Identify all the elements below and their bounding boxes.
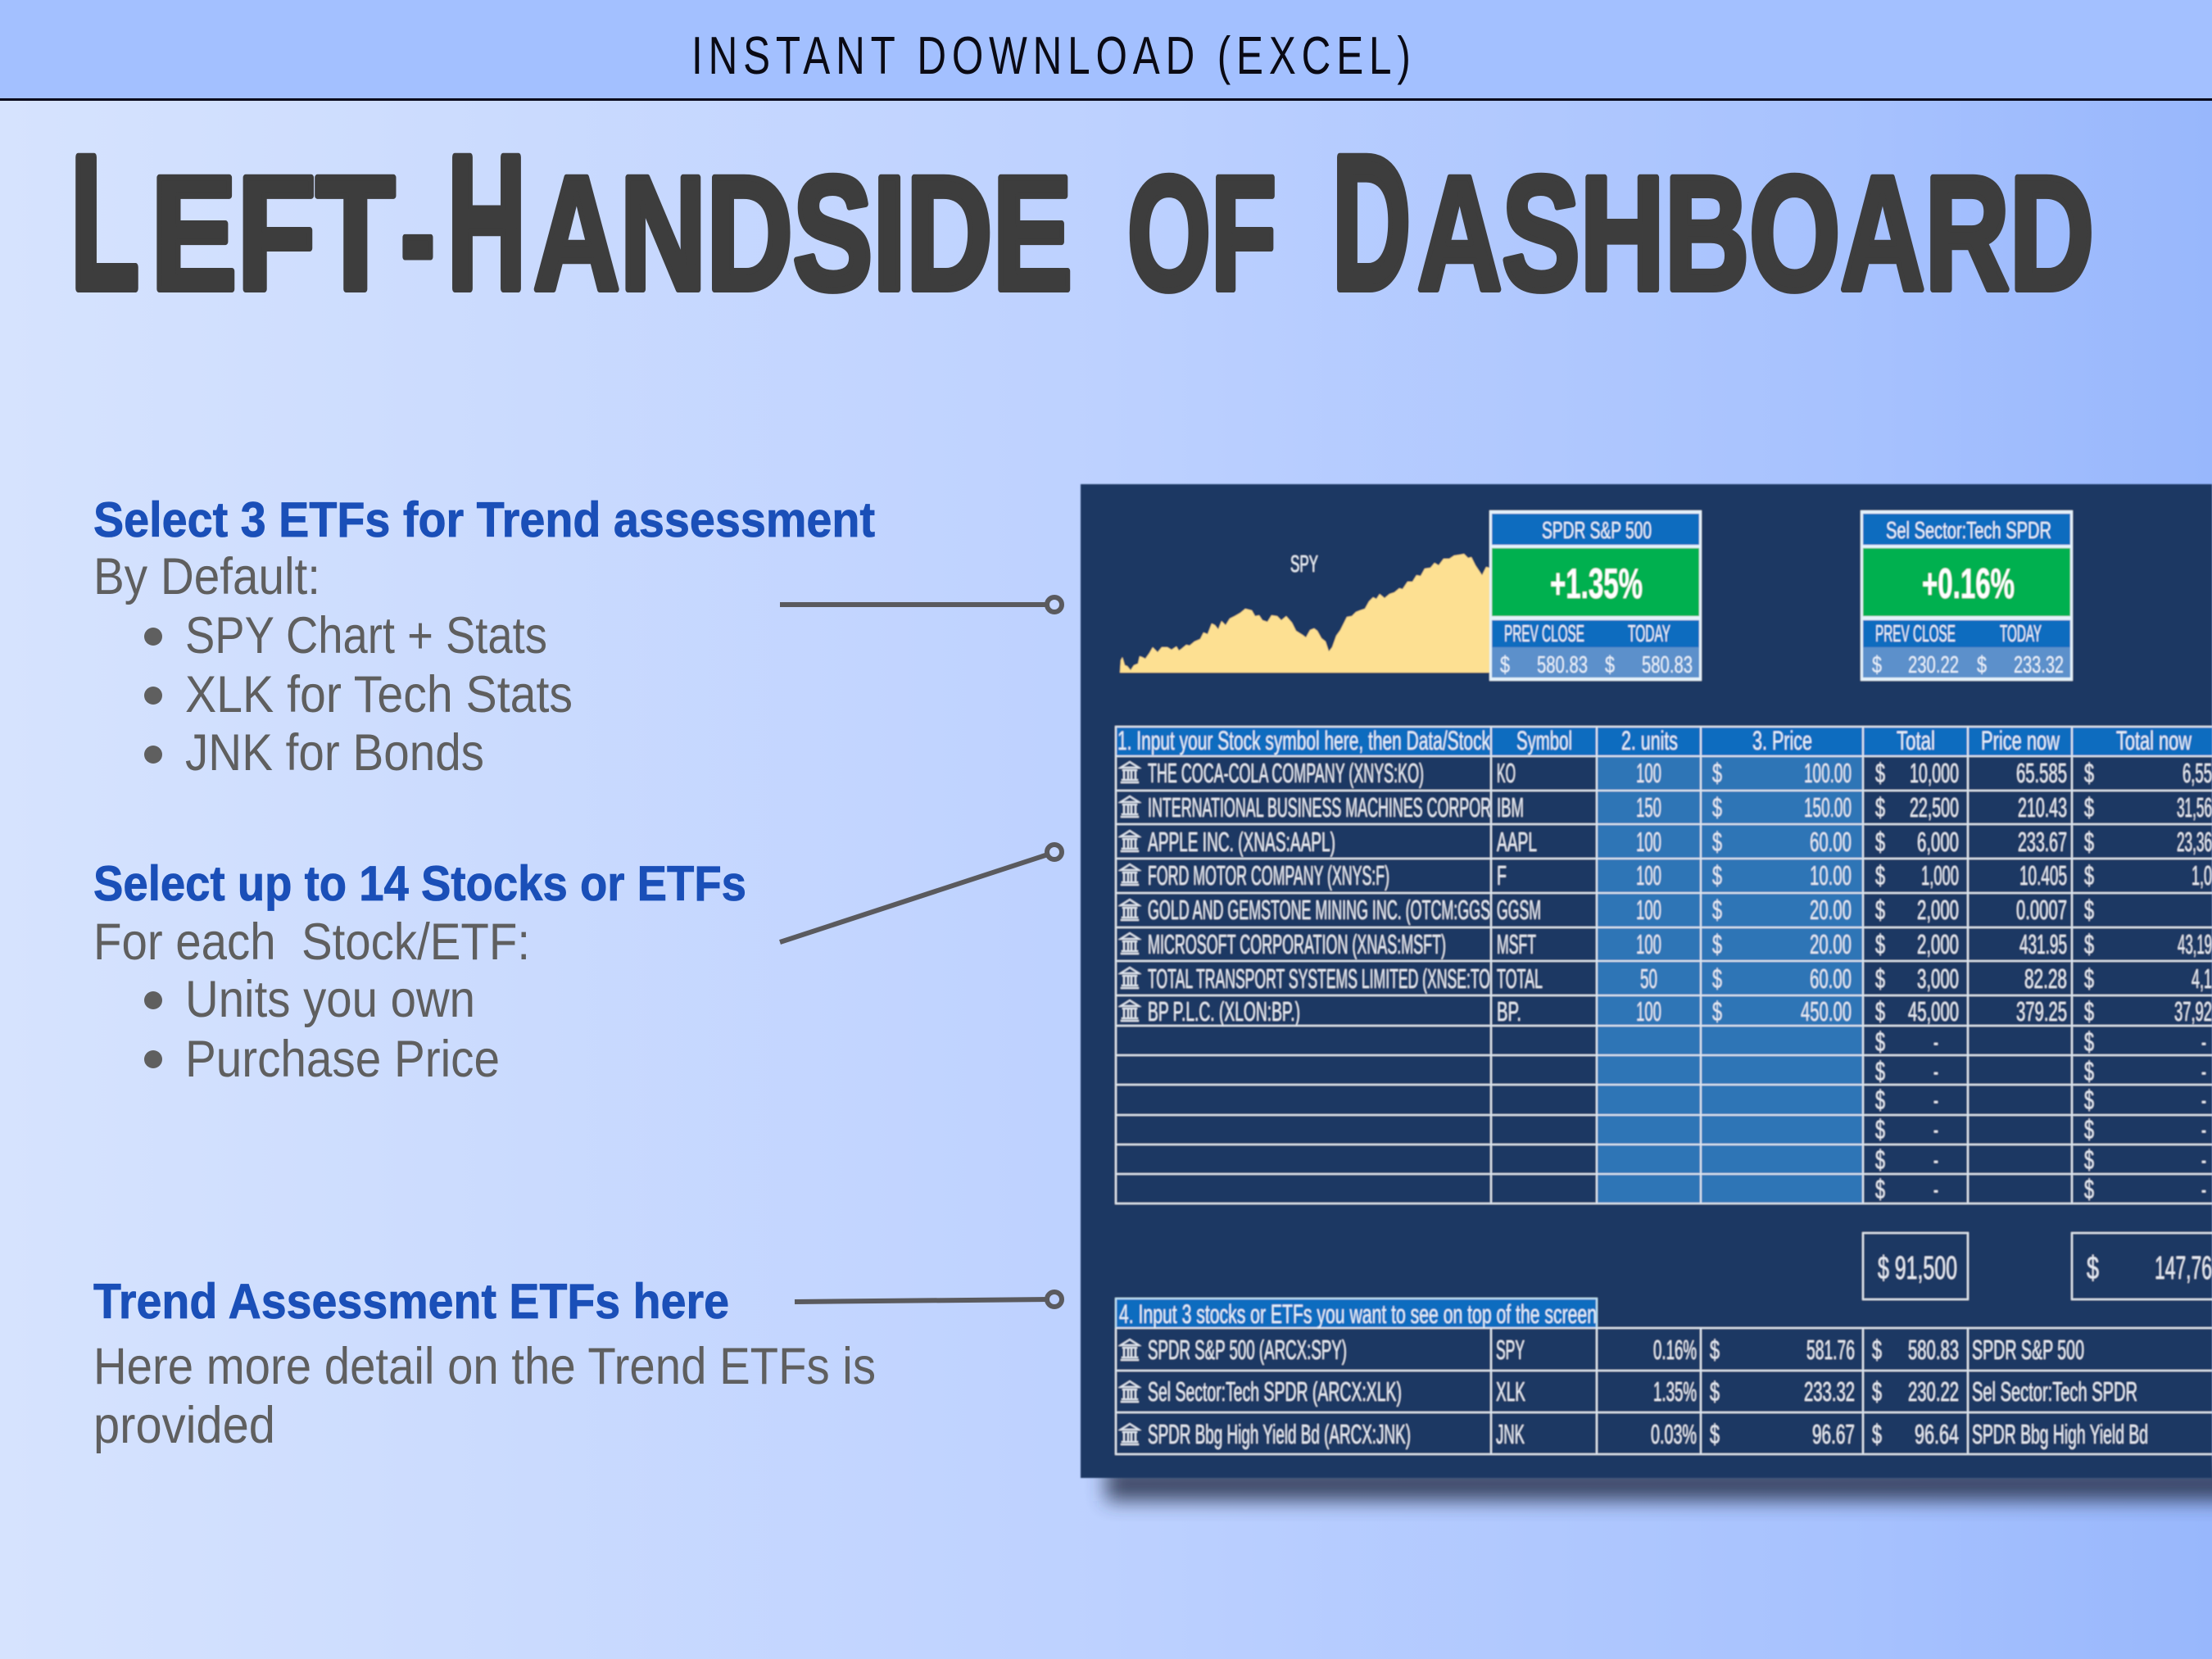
title: ANDSIDE [533, 143, 1072, 324]
empty rows: - [2201, 1114, 2206, 1145]
row: BP [1121, 996, 2212, 1027]
row: XLK: 233.32 [1804, 1376, 1855, 1407]
empty rows: $ [2084, 1174, 2094, 1204]
title: D [1332, 116, 1411, 329]
row: BP: BP. [1497, 996, 1521, 1027]
empty rows: $ [2084, 1145, 2094, 1175]
row: BP: $ [1712, 996, 1722, 1027]
row: XLK: $ [1872, 1376, 1882, 1407]
row: Gold and Gemstone [1121, 895, 2094, 925]
row: Microsoft: 20.00 [1810, 929, 1852, 959]
row: Gold and Gemstone: 0.0007 [2016, 895, 2067, 925]
card: SPDR S&P 500: 580.83 [1642, 652, 1693, 678]
title: EFT [151, 143, 395, 324]
title [70, 116, 2094, 329]
card: SPDR S&P 500 [1489, 510, 1702, 681]
row: Total Transport [1121, 963, 2212, 994]
row: Coca-Cola: $ [1875, 758, 1885, 788]
text block: trend ETFs: By Default: [93, 548, 320, 605]
row: XLK: $ [1710, 1376, 1720, 1407]
row: Apple: APPLE INC. (XNAS:AAPL) [1148, 827, 1335, 857]
total box: cost: $ 91,500 [1878, 1250, 1957, 1286]
row: IBM: INTERNATIONAL BUSINESS MACHINES CORPOR [1148, 792, 1491, 823]
row: Total Transport: TOTAL [1497, 963, 1543, 994]
row: SPY [1121, 1335, 2084, 1365]
empty rows: - [1933, 1145, 1938, 1175]
card: Sel Sector Tech SPDR: 230.22 [1908, 652, 1959, 678]
row: BP: 45,000 [1908, 996, 1959, 1027]
row: Coca-Cola: $ [2084, 758, 2094, 788]
text block: trend assessment [93, 1274, 876, 1454]
row: Coca-Cola: THE COCA-COLA COMPANY (XNYS:KO) [1148, 758, 1424, 788]
text block: stocks: For each Stock/ETF: [93, 913, 530, 971]
table header row: 3. Price [1752, 726, 1812, 755]
card: Sel Sector Tech SPDR: Sel Sector:Tech SPDR [1886, 518, 2051, 544]
row: BP: $ [2084, 996, 2094, 1027]
row: Microsoft [1121, 929, 2212, 959]
card: SPDR S&P 500: 580.83 [1537, 652, 1588, 678]
row: Microsoft: $ [1875, 929, 1885, 959]
table header row [1117, 726, 2192, 755]
row: Gold and Gemstone: $ [2084, 895, 2094, 925]
row: Total Transport: 50 [1640, 963, 1657, 994]
text block: trend assessment: Here more detail on the Trend ETFs is [93, 1338, 876, 1395]
row: SPY: 581.76 [1806, 1335, 1855, 1365]
row: Total Transport: $ [1712, 963, 1722, 994]
card: Sel Sector Tech SPDR [1861, 510, 2073, 681]
row: JNK: $ [1710, 1419, 1720, 1449]
row: JNK: 96.67 [1812, 1419, 1855, 1449]
text block: trend assessment: provided [93, 1397, 275, 1454]
row: Gold and Gemstone: $ [1875, 895, 1885, 925]
row: SPY: SPY [1496, 1335, 1525, 1365]
header band [0, 0, 2212, 101]
row: Coca-Cola: 100 [1636, 758, 1661, 788]
row: Total Transport: $ [2084, 963, 2094, 994]
empty rows: $ [1875, 1114, 1885, 1145]
row: Total Transport: 60.00 [1810, 963, 1852, 994]
row: XLK [1121, 1376, 2137, 1407]
panel shadow [1106, 1466, 2212, 1501]
row: SPY: $ [1872, 1335, 1882, 1365]
row: Ford: 10.405 [2019, 860, 2067, 891]
row: Ford: 10.00 [1810, 860, 1852, 891]
row: Total Transport: 3,000 [1917, 963, 1959, 994]
table: portfolio holdings [1116, 726, 2212, 1204]
row: Apple [1121, 827, 2212, 857]
row: Gold and Gemstone: GOLD AND GEMSTONE MINING INC. (OTCM:GGS [1148, 895, 1490, 925]
row: SPY: $ [1710, 1335, 1720, 1365]
title: OF [1127, 143, 1276, 324]
row: Gold and Gemstone: 20.00 [1810, 895, 1852, 925]
text block: stocks: Purchase Price [185, 1031, 500, 1088]
row: Apple: $ [2084, 827, 2094, 857]
row: XLK: Sel Sector:Tech SPDR (ARCX:XLK) [1148, 1376, 1402, 1407]
row: IBM: 22,500 [1910, 792, 1959, 823]
row: IBM: $ [1875, 792, 1885, 823]
arrow: trend connector [780, 597, 1062, 612]
row: Microsoft: 2,000 [1917, 929, 1959, 959]
text block: stocks: Select up to 14 Stocks or ETFs [93, 856, 746, 911]
row: SPY: SPDR S&P 500 (ARCX:SPY) [1148, 1335, 1347, 1365]
empty rows: - [2201, 1085, 2206, 1115]
row: JNK: 96.64 [1915, 1419, 1959, 1449]
row: Microsoft: $ [2084, 929, 2094, 959]
row: Coca-Cola: KO [1497, 758, 1516, 788]
table header row: Price now [1981, 726, 2060, 755]
row: BP: 100 [1636, 996, 1661, 1027]
table header row: Symbol [1516, 726, 1572, 755]
title: H [447, 116, 526, 329]
chart label: SPY [1290, 551, 1318, 578]
card: Sel Sector Tech SPDR: $ [1977, 652, 1987, 678]
empty rows: - [2201, 1174, 2206, 1204]
row: Gold and Gemstone: GGSM [1497, 895, 1541, 925]
arrow: trend ETF connector [795, 1292, 1062, 1307]
trend table header: 4. Input 3 stocks or ETFs you want to see on top of the screen [1119, 1299, 1597, 1329]
empty rows: - [1933, 1174, 1938, 1204]
text block: stocks [93, 856, 746, 1088]
row: Gold and Gemstone: $ [1712, 895, 1722, 925]
empty rows: $ [2084, 1085, 2094, 1115]
text block: trend ETFs: XLK for Tech Stats [185, 666, 573, 723]
row: Ford [1121, 860, 2212, 891]
empty rows: - [2201, 1027, 2206, 1057]
text block: trend ETFs [93, 492, 875, 782]
row: Apple: AAPL [1497, 827, 1537, 857]
card: Sel Sector Tech SPDR: 233.32 [2014, 652, 2064, 678]
row: Microsoft: MICROSOFT CORPORATION (XNAS:MSFT) [1148, 929, 1446, 959]
text block: trend ETFs: SPY Chart + Stats [185, 607, 547, 664]
row: Coca-Cola: 10,000 [1910, 758, 1959, 788]
empty rows: $ [1875, 1174, 1885, 1204]
text block: trend assessment: Trend Assessment ETFs here [93, 1274, 729, 1329]
empty rows: - [1933, 1027, 1938, 1057]
text block: stocks: Units you own [185, 971, 475, 1028]
table header row: 2. units [1621, 726, 1678, 755]
row: SPY: 0.16% [1653, 1335, 1697, 1365]
row: Apple: $ [1875, 827, 1885, 857]
card: SPDR S&P 500: $ [1500, 652, 1510, 678]
row: IBM: 150 [1636, 792, 1661, 823]
empty rows: $ [2084, 1027, 2094, 1057]
card: Sel Sector Tech SPDR: $ [1872, 652, 1882, 678]
title: - [401, 143, 435, 324]
row: IBM [1121, 792, 2212, 823]
title: L [70, 116, 139, 329]
empty rows: $ [1875, 1145, 1885, 1175]
panel: dashboard screenshot [1081, 484, 2212, 1478]
empty rows [1875, 1027, 2206, 1204]
card: SPDR S&P 500: SPDR S&P 500 [1542, 518, 1652, 544]
row: Apple: 60.00 [1810, 827, 1852, 857]
row: JNK [1121, 1419, 2148, 1449]
row: Ford: FORD MOTOR COMPANY (XNYS:F) [1148, 860, 1389, 891]
text block: trend ETFs: Select 3 ETFs for Trend assessment [93, 492, 875, 547]
empty rows: - [1933, 1056, 1938, 1086]
empty rows: $ [1875, 1027, 1885, 1057]
row: IBM: 150.00 [1804, 792, 1852, 823]
card: Sel Sector Tech SPDR: +0.16% [1922, 560, 2015, 608]
row: Apple: 100 [1636, 827, 1661, 857]
total box: cost [1863, 1233, 1968, 1299]
row: XLK: 1.35% [1653, 1376, 1697, 1407]
card: Sel Sector Tech SPDR: PREV CLOSE [1875, 621, 1956, 647]
row: Ford: $ [2084, 860, 2094, 891]
empty rows: - [1933, 1114, 1938, 1145]
row: Apple: $ [1712, 827, 1722, 857]
row: Microsoft: 431.95 [2019, 929, 2067, 959]
chart: SPY area [1120, 551, 1489, 673]
row: Ford: $ [1875, 860, 1885, 891]
total box: current value: $ [2087, 1250, 2099, 1286]
row: Microsoft: 100 [1636, 929, 1661, 959]
row: BP: BP P.L.C. (XLON:BP.) [1148, 996, 1300, 1027]
row: JNK: $ [1872, 1419, 1882, 1449]
row: Gold and Gemstone: 100 [1636, 895, 1661, 925]
row: Total Transport: TOTAL TRANSPORT SYSTEMS LIMITED (XNSE:TO [1148, 963, 1490, 994]
row: Coca-Cola: 65.585 [2016, 758, 2067, 788]
row: Microsoft: $ [1712, 929, 1722, 959]
row: XLK: XLK [1496, 1376, 1525, 1407]
row: Total Transport: $ [1875, 963, 1885, 994]
table: trend ETFs [1116, 1299, 2212, 1455]
card: SPDR S&P 500: TODAY [1628, 621, 1670, 647]
row: JNK: SPDR Bbg High Yield Bd (ARCX:JNK) [1148, 1419, 1411, 1449]
total box: current value [2072, 1233, 2212, 1299]
row: Ford: $ [1712, 860, 1722, 891]
row: Coca-Cola: $ [1712, 758, 1722, 788]
row: Coca-Cola: 100.00 [1804, 758, 1852, 788]
empty rows: - [1933, 1085, 1938, 1115]
empty rows: $ [2084, 1114, 2094, 1145]
row: IBM: IBM [1497, 792, 1524, 823]
row: IBM: $ [1712, 792, 1722, 823]
row: XLK: 230.22 [1908, 1376, 1959, 1407]
card: SPDR S&P 500: +1.35% [1550, 560, 1643, 608]
row: Ford: F [1497, 860, 1507, 891]
row: BP: 379.25 [2016, 996, 2067, 1027]
row: Coca-Cola [1121, 758, 2212, 788]
empty rows: - [2201, 1056, 2206, 1086]
empty rows: $ [1875, 1085, 1885, 1115]
row: Apple: 233.67 [2018, 827, 2067, 857]
row: SPY: 580.83 [1908, 1335, 1959, 1365]
row: Ford: 100 [1636, 860, 1661, 891]
row: JNK: JNK [1496, 1419, 1525, 1449]
table header row: Total [1897, 726, 1935, 755]
row: SPY: SPDR S&P 500 [1972, 1335, 2084, 1365]
row: Gold and Gemstone: 2,000 [1917, 895, 1959, 925]
arrow: stocks connector [780, 845, 1062, 942]
row: IBM: 210.43 [2018, 792, 2067, 823]
row: Microsoft: MSFT [1497, 929, 1536, 959]
table header row: 1. Input your Stock symbol here, then Data/Stock [1117, 726, 1491, 755]
card: SPDR S&P 500: $ [1605, 652, 1615, 678]
row: JNK: 0.03% [1651, 1419, 1697, 1449]
row: Ford: 1,000 [1921, 860, 1959, 891]
row: Total Transport: 82.28 [2024, 963, 2067, 994]
empty rows: - [2201, 1145, 2206, 1175]
empty rows: $ [1875, 1056, 1885, 1086]
header text: INSTANT DOWNLOAD (EXCEL) [691, 27, 1411, 86]
row: IBM: $ [2084, 792, 2094, 823]
card: Sel Sector Tech SPDR: TODAY [2000, 621, 2042, 647]
empty rows: $ [2084, 1056, 2094, 1086]
row: BP: $ [1875, 996, 1885, 1027]
row: BP: 450.00 [1801, 996, 1852, 1027]
text block: trend ETFs: JNK for Bonds [185, 724, 484, 782]
card: SPDR S&P 500: PREV CLOSE [1504, 621, 1584, 647]
row: Apple: 6,000 [1917, 827, 1959, 857]
